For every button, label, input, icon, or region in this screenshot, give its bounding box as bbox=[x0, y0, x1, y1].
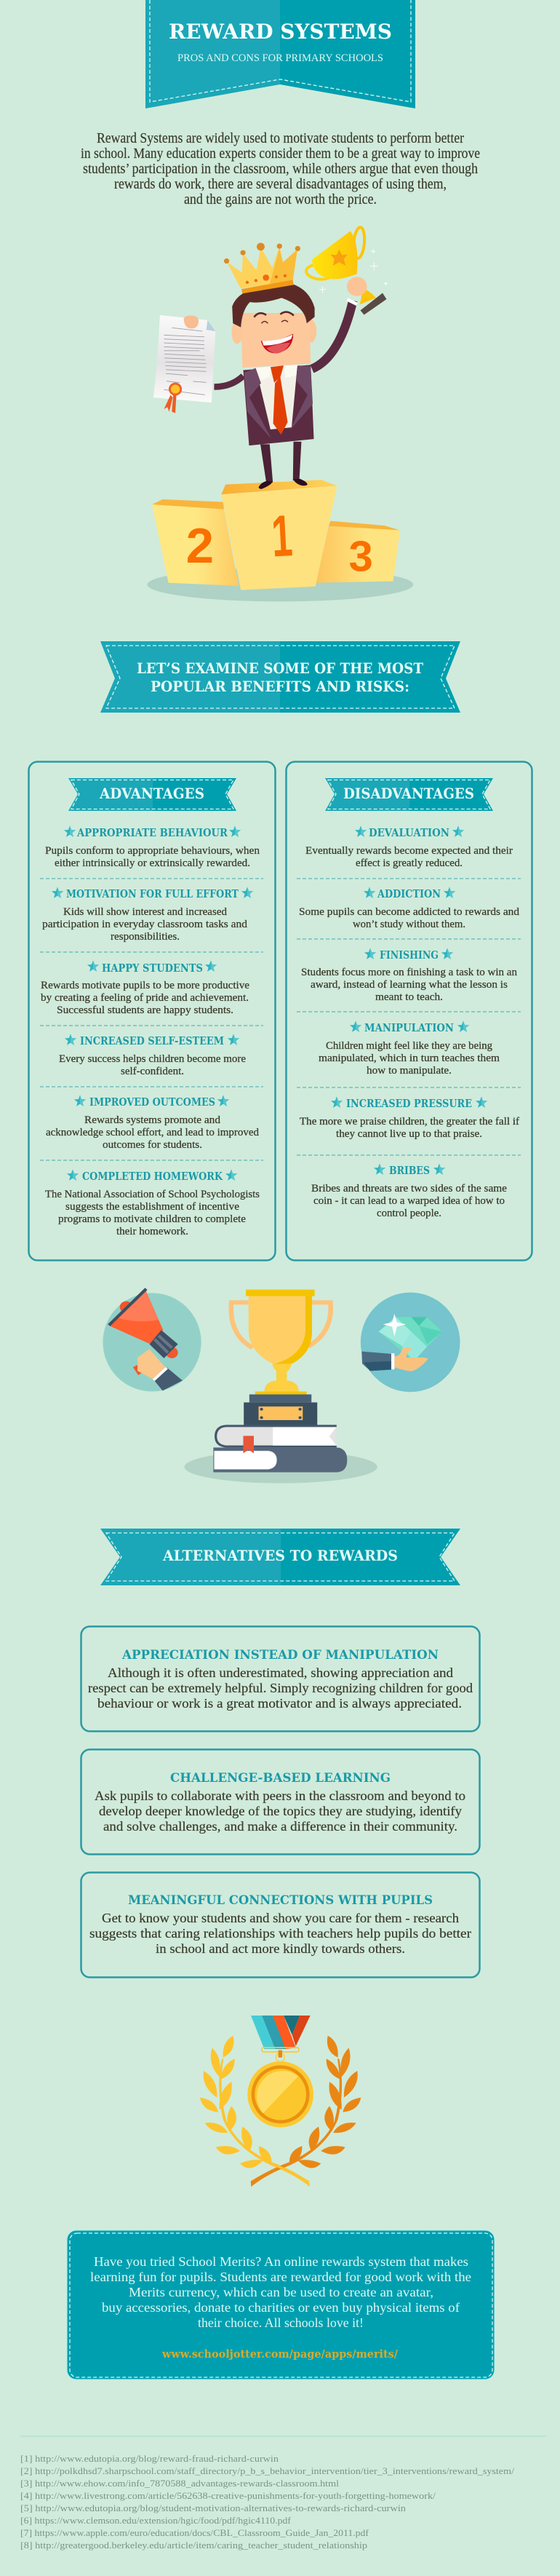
item: appropriate behaviour: Pupils conform to appropriate behaviours, when bbox=[45, 845, 260, 857]
item: bribes: BRIBES bbox=[389, 1164, 430, 1177]
panel: meaningful connections with pupils: Get to know your students and show you care for them - research bbox=[102, 1911, 459, 1925]
panel: meaningful connections with pupils: in school and act more kindly towards others. bbox=[156, 1941, 405, 1956]
item: improved outcomes bbox=[46, 1095, 259, 1151]
clasp and ring bbox=[262, 2048, 299, 2062]
item: devaluation: Eventually rewards become expected and their bbox=[305, 845, 513, 857]
item: happy students: HAPPY STUDENTS bbox=[102, 962, 203, 975]
item: motivation for full effort: responsibilities. bbox=[111, 931, 180, 943]
item: manipulation: MANIPULATION bbox=[364, 1021, 454, 1034]
icon: megaphone bbox=[103, 1289, 201, 1392]
callout: school merits: buy accessories, donate to charities or even buy physical items of bbox=[102, 2300, 460, 2315]
panel: appreciation instead of manipulation: APPRECIATION INSTEAD OF MANIPULATION bbox=[121, 1648, 439, 1662]
item: improved outcomes: IMPROVED OUTCOMES bbox=[89, 1095, 215, 1109]
ribbon bbox=[251, 2016, 311, 2049]
item: increased pressure: INCREASED PRESSURE bbox=[346, 1097, 472, 1110]
item: appropriate behaviour: either intrinsically or extrinsically rewarded. bbox=[55, 857, 250, 869]
item: increased pressure bbox=[300, 1096, 519, 1140]
laurel: right bbox=[251, 2036, 361, 2187]
item: bribes: coin - it can lead to a warped idea of how to bbox=[313, 1195, 505, 1207]
references list: [1] http://www.edutopia.org/blog/reward-fraud-richard-curwin bbox=[20, 2453, 279, 2464]
item: manipulation: manipulated, which in turn teaches them bbox=[319, 1053, 500, 1064]
panel: challenge-based learning bbox=[81, 1750, 480, 1855]
callout: school merits: Merits currency, which can be used to create an avatar, bbox=[129, 2285, 433, 2299]
man bbox=[214, 284, 353, 489]
item: finishing: FINISHING bbox=[380, 948, 439, 962]
item: improved outcomes: outcomes for students. bbox=[103, 1139, 202, 1151]
illustrations: megaphone, trophy on books, diamond bbox=[103, 1289, 460, 1483]
intro text: rewards do work, there are several disadvantages of using them, bbox=[114, 176, 447, 192]
panel: challenge-based learning: Ask pupils to collaborate with peers in the classroom and beyond to bbox=[95, 1788, 465, 1803]
banner: let's examine bbox=[100, 641, 460, 713]
item: happy students: Rewards motivate pupils to be more productive bbox=[41, 980, 249, 991]
panel: disadvantages bbox=[287, 761, 532, 1261]
references list: [8] http://greatergood.berkeley.edu/article/item/caring_teacher_student_relationship bbox=[20, 2540, 367, 2551]
item: bribes bbox=[311, 1163, 507, 1219]
item: appropriate behaviour: APPROPRIATE BEHAVIOUR bbox=[76, 826, 228, 839]
intro text: students’ participation in the classroom, while others argue that even though bbox=[83, 161, 478, 177]
item: motivation for full effort bbox=[42, 887, 253, 943]
crown bbox=[224, 243, 300, 293]
podium shadow bbox=[148, 568, 413, 601]
icon: medal with laurel wreath bbox=[200, 2016, 361, 2187]
title ribbon bbox=[145, 0, 415, 108]
icon: trophy on books bbox=[184, 1290, 377, 1483]
item: happy students: Successful students are happy students. bbox=[57, 1004, 233, 1016]
podium step 3 bbox=[316, 521, 400, 583]
item: addiction: ADDICTION bbox=[377, 887, 441, 900]
item: devaluation bbox=[305, 825, 513, 869]
panel: appreciation instead of manipulation: behaviour or work is a great motivator and is always appreciated. bbox=[97, 1696, 462, 1711]
subtitle: PROS AND CONS FOR PRIMARY SCHOOLS bbox=[177, 52, 383, 64]
illustration: businessman with crown and trophy on podium bbox=[148, 227, 413, 601]
references list bbox=[20, 2453, 514, 2551]
panel: meaningful connections with pupils bbox=[81, 1872, 480, 1977]
item: addiction: Some pupils can become addicted to rewards and bbox=[299, 906, 520, 918]
banner: advantages: ADVANTAGES bbox=[99, 785, 204, 802]
item: increased self-esteem: self-confident. bbox=[121, 1066, 184, 1077]
item: motivation for full effort: MOTIVATION FOR FULL EFFORT bbox=[66, 887, 239, 900]
item: manipulation bbox=[319, 1021, 500, 1077]
item: completed homework: programs to motivate children to complete bbox=[58, 1213, 246, 1225]
panel: appreciation instead of manipulation: respect can be extremely helpful. Simply recognizing children for good bbox=[88, 1681, 473, 1695]
intro text: and the gains are not worth the price. bbox=[184, 191, 377, 207]
panel: meaningful connections with pupils: MEANINGFUL CONNECTIONS WITH PUPILS bbox=[128, 1893, 433, 1908]
banner: alternatives to rewards bbox=[100, 1529, 460, 1585]
panel: meaningful connections with pupils: suggests that caring relationships with teachers help pupils do better bbox=[89, 1926, 471, 1941]
panel: appreciation instead of manipulation: Although it is often underestimated, showing appreciation and bbox=[108, 1665, 453, 1680]
panel: challenge-based learning: and solve challenges, and make a difference in their community. bbox=[103, 1819, 457, 1834]
panel: challenge-based learning: develop deeper knowledge of the topics they are studying, identify bbox=[99, 1804, 462, 1818]
laurel: left bbox=[200, 2036, 310, 2187]
callout: school merits: learning fun for pupils. Students are rewarded for good work with the bbox=[90, 2270, 471, 2284]
item: finishing: meant to teach. bbox=[375, 991, 443, 1003]
item: manipulation: how to manipulate. bbox=[367, 1065, 452, 1077]
item: addiction: won’t study without them. bbox=[353, 919, 465, 930]
item: addiction bbox=[299, 887, 520, 930]
item: improved outcomes: acknowledge school effort, and lead to improved bbox=[46, 1127, 259, 1138]
panel: advantages bbox=[29, 761, 275, 1261]
certificate bbox=[153, 315, 215, 413]
item: motivation for full effort: Kids will show interest and increased bbox=[63, 906, 228, 918]
item: happy students: by creating a feeling of pride and achievement. bbox=[41, 992, 249, 1004]
banner text: LET’S EXAMINE SOME OF THE MOST bbox=[137, 659, 423, 677]
item: increased self-esteem bbox=[59, 1034, 246, 1077]
item: completed homework: The National Association of School Psychologists bbox=[45, 1189, 260, 1200]
item: finishing: Students focus more on finishing a task to win an bbox=[301, 967, 517, 978]
intro text bbox=[81, 130, 480, 207]
item: completed homework: COMPLETED HOMEWORK bbox=[82, 1170, 223, 1183]
podium step 2 bbox=[152, 499, 239, 586]
item: improved outcomes: Rewards systems promote and bbox=[84, 1114, 221, 1126]
references list: [2] http://polkdhsd7.sharpschool.com/staff_directory/p_b_s_behavior_intervention/tier_3_interventions/reward_system/ bbox=[20, 2465, 514, 2476]
references list: [7] https://www.apple.com/euro/education/docs/CBL_Classroom_Guide_Jan_2011.pdf bbox=[20, 2527, 369, 2538]
item: increased pressure: they cannot live up to that praise. bbox=[336, 1128, 482, 1140]
intro text: in school. Many education experts consider them to be a great way to improve bbox=[81, 146, 480, 162]
podium step 3: 3 bbox=[348, 532, 373, 580]
banner text: POPULAR BENEFITS AND RISKS: bbox=[151, 678, 409, 695]
references list: [3] http://www.ehow.com/info_7870588_advantages-rewards-classroom.html bbox=[20, 2478, 339, 2489]
banner: disadvantages: DISADVANTAGES bbox=[343, 785, 474, 802]
item: bribes: control people. bbox=[377, 1208, 441, 1219]
podium step 2: 2 bbox=[186, 518, 214, 574]
item: increased self-esteem: INCREASED SELF-ESTEEM bbox=[80, 1034, 224, 1047]
trophy in raised hand bbox=[305, 227, 388, 314]
references list: [5] http://www.edutopia.org/blog/student-motivation-alternatives-to-rewards-richard-curwin bbox=[20, 2502, 407, 2513]
item: increased self-esteem: Every success helps children become more bbox=[59, 1053, 246, 1065]
panel: appreciation instead of manipulation bbox=[81, 1626, 480, 1731]
banner: alternatives to rewards: ALTERNATIVES TO REWARDS bbox=[162, 1547, 398, 1564]
podium step 1 bbox=[221, 480, 337, 590]
item: bribes: Bribes and threats are two sides of the same bbox=[311, 1183, 507, 1194]
references list: [6] https://www.clemson.edu/extension/hgic/food/pdf/hgic4110.pdf bbox=[20, 2515, 292, 2526]
banner: advantages bbox=[68, 778, 236, 811]
references list: [4] http://www.livestrong.com/article/562638-creative-punishments-for-youth-forgetting-homework/ bbox=[20, 2490, 436, 2501]
medal bbox=[247, 2061, 313, 2128]
link: www.schooljotter.com/page/apps/merits/ bbox=[161, 2347, 398, 2361]
banner text bbox=[137, 659, 423, 695]
item: devaluation: effect is greatly reduced. bbox=[356, 857, 463, 869]
item: completed homework bbox=[45, 1169, 260, 1237]
item: manipulation: Children might feel like they are being bbox=[326, 1040, 492, 1052]
item: completed homework: their homework. bbox=[116, 1226, 188, 1237]
intro text: Reward Systems are widely used to motivate students to perform better bbox=[97, 130, 464, 146]
title: REWARD SYSTEMS bbox=[169, 20, 392, 44]
callout: school merits: Have you tried School Merits? An online rewards system that makes bbox=[94, 2254, 468, 2269]
item: finishing bbox=[301, 948, 517, 1003]
banner: disadvantages bbox=[325, 778, 493, 811]
item: devaluation: DEVALUATION bbox=[369, 826, 449, 839]
callout: school merits: their choice. All schools love it! bbox=[198, 2315, 364, 2330]
item: appropriate behaviour bbox=[45, 825, 260, 869]
item: finishing: award, instead of learning what the lesson is bbox=[311, 979, 508, 991]
item: increased pressure: The more we praise children, the greater the fall if bbox=[300, 1116, 519, 1128]
laurel crossing bbox=[273, 2165, 309, 2186]
podium step 1: 1 bbox=[270, 504, 294, 569]
icon: diamond in hand bbox=[361, 1293, 460, 1392]
panel: challenge-based learning: CHALLENGE-BASED LEARNING bbox=[170, 1771, 391, 1786]
item: completed homework: suggests the establishment of incentive bbox=[65, 1201, 239, 1213]
callout: school merits bbox=[67, 2230, 495, 2379]
item: motivation for full effort: participation in everyday classroom tasks and bbox=[42, 919, 248, 930]
item: happy students bbox=[41, 961, 249, 1016]
